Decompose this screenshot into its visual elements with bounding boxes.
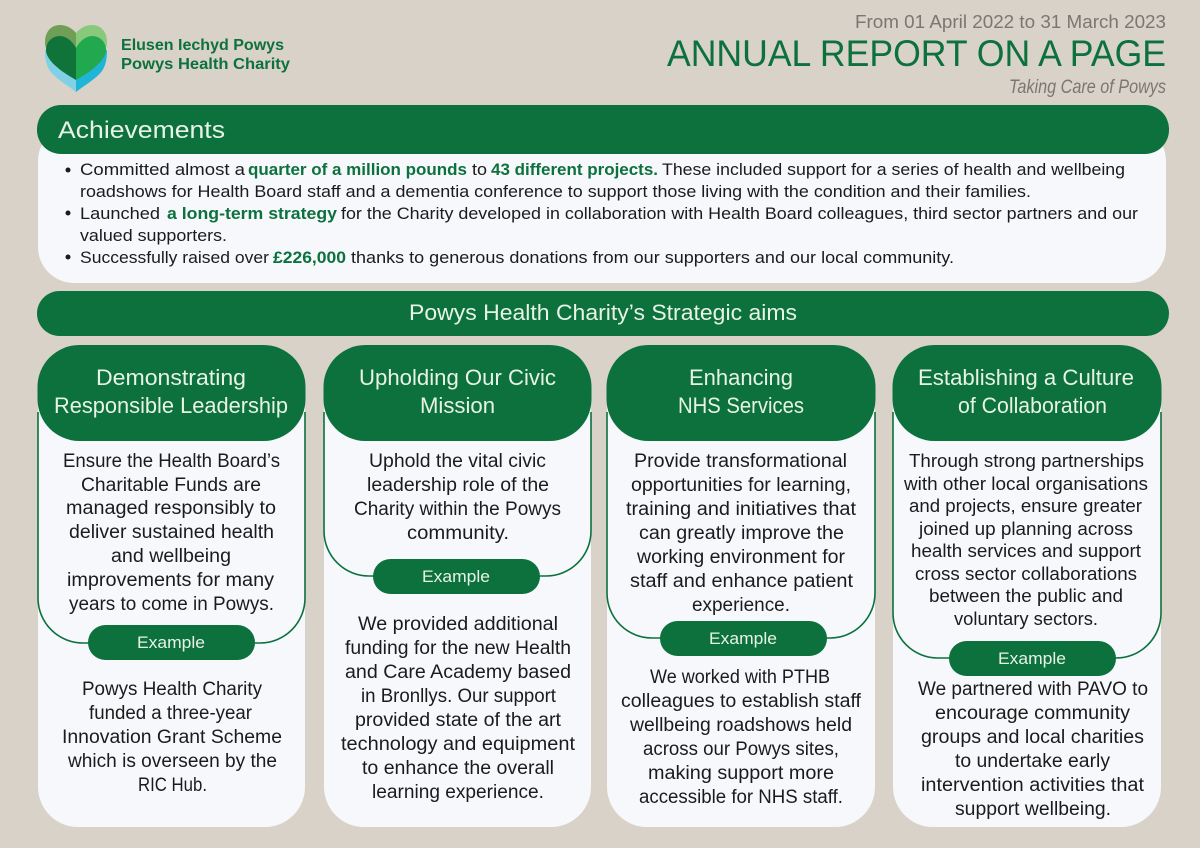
aim text: joined up planning across [918,519,1133,539]
achievements list: valued supporters. [80,226,227,245]
example text: learning experience. [372,782,544,803]
achievements list: £226,000 [273,248,346,267]
card heading: Mission [420,393,495,418]
example text: groups and local charities [921,727,1144,748]
card heading: Establishing a Culture [918,365,1134,390]
example pill: Example [137,633,205,652]
card heading [892,345,1162,441]
aim text: years to come in Powys. [69,594,274,615]
example text: colleagues to establish staff [621,691,862,712]
logo text: Elusen Iechyd Powys [121,37,284,54]
example pill: Example [709,629,777,648]
card heading: of Collaboration [958,393,1107,418]
aim text: with other local organisations [903,474,1148,494]
aim text: working environment for [636,547,846,568]
aim text: community. [407,523,509,544]
card heading: Demonstrating [96,365,246,390]
example text: encourage community [935,703,1131,724]
achievements list: Committed almost a [80,160,246,179]
panel: demonstrating responsible leadership [38,345,306,827]
aim text: experience. [692,595,790,616]
aim text: managed responsibly to [66,498,276,519]
aim text: health services and support [911,541,1141,561]
example text [621,667,862,808]
aim text: Provide transformational [634,451,847,472]
example text: to enhance the overall [362,758,554,779]
achievements list: Launched [80,204,160,223]
aim text: Through strong partnerships [909,451,1144,471]
example text: support wellbeing. [955,799,1111,820]
card heading: NHS Services [678,393,804,418]
aim text: leadership role of the [367,475,549,496]
example text: technology and equipment [341,734,576,755]
example text: provided state of the art [355,710,562,731]
aim text: and wellbeing [111,546,231,567]
aim text [903,451,1148,629]
example text [918,679,1148,820]
card heading: Enhancing [689,365,793,390]
example text [62,679,282,796]
aim text [63,451,280,615]
card heading [38,345,306,441]
card heading: Responsible Leadership [54,393,288,418]
example text: to undertake early [955,751,1111,772]
achievements list: for the Charity developed in collaboration with Health Board colleagues, third sector partners and our [341,204,1138,223]
aim text: between the public and [929,586,1123,606]
panel: achievements [37,105,1169,283]
logo [45,25,290,92]
example pill [660,621,827,656]
aim text: improvements for many [67,570,275,591]
aim text [354,451,561,544]
example pill: Example [422,567,490,586]
example text: We provided additional [358,614,558,635]
title: ANNUAL REPORT ON A PAGE [667,33,1166,74]
aim text: Charity within the Powys [354,499,561,520]
aim text: cross sector collaborations [915,564,1137,584]
aim text: can greatly improve the [639,523,844,544]
example text: funding for the new Health [345,638,571,659]
panel: enhancing nhs services [606,345,876,827]
example text: accessible for NHS staff. [639,787,843,808]
achievements list: 43 different projects. [491,160,658,179]
example text: in Bronllys. Our support [361,686,557,707]
example text: which is overseen by the [67,751,277,772]
logo text [121,37,290,73]
aim text: voluntary sectors. [954,609,1098,629]
example text: We worked with PTHB [650,667,830,688]
achievements heading bar [37,105,1169,154]
example text [341,614,576,803]
example text: intervention activities that [921,775,1145,796]
panel: establishing a culture of collaboration [892,345,1162,827]
card heading [324,345,592,441]
example pill [373,559,540,594]
aim text: staff and enhance patient [630,571,854,592]
aim text: opportunities for learning, [631,475,851,496]
aim text: deliver sustained health [69,522,274,543]
card heading: Upholding Our Civic [359,365,556,390]
example text: making support more [648,763,834,784]
aim text: training and initiatives that [626,499,857,520]
example text: funded a three-year [89,703,253,724]
achievements heading bar: Achievements [58,117,225,144]
strategic aims banner [37,291,1169,336]
aim text [626,451,857,616]
icon: heart [45,25,107,92]
aim text: Ensure the Health Board’s [63,451,280,472]
achievements list: These included support for a series of health and wellbeing [662,160,1125,179]
example text: Powys Health Charity [82,679,262,700]
achievements list: a long-term strategy [167,204,338,223]
achievements list: Successfully raised over [80,248,269,267]
example text: and Care Academy based [345,662,571,683]
achievements list [66,160,1138,267]
logo text: Powys Health Charity [121,56,290,73]
example text: Innovation Grant Scheme [62,727,282,748]
example pill [88,625,255,660]
aim text: and projects, ensure greater [909,496,1142,516]
panel: upholding our civic mission [324,345,592,827]
example text: RIC Hub. [138,775,207,796]
aim text: Uphold the vital civic [369,451,546,472]
achievements list: quarter of a million pounds [248,160,467,179]
card heading [606,345,876,441]
tagline: Taking Care of Powys [1009,77,1166,98]
example pill [949,641,1116,676]
example text: We partnered with PAVO to [918,679,1148,700]
achievements list: to [472,160,487,179]
achievements list: roadshows for Health Board staff and a dementia conference to support those living with the condition and their families. [80,182,1031,201]
achievements list: thanks to generous donations from our supporters and our local community. [351,248,954,267]
example text: across our Powys sites, [643,739,839,760]
strategic aims banner: Powys Health Charity’s Strategic aims [409,300,797,325]
example text: wellbeing roadshows held [629,715,852,736]
example pill: Example [998,649,1066,668]
aim text: Charitable Funds are [81,475,261,496]
date range: From 01 April 2022 to 31 March 2023 [855,11,1166,32]
